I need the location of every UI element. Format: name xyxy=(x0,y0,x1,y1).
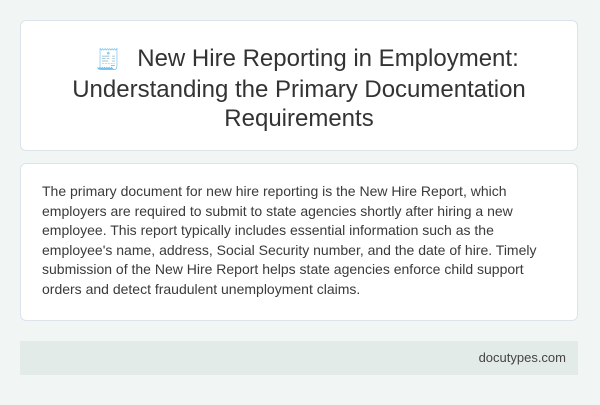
footer xyxy=(20,341,578,375)
title: 🧾 xyxy=(96,49,121,71)
description panel xyxy=(20,163,578,321)
footer: docutypes.com xyxy=(479,350,566,365)
description text: The primary document for new hire reporting is the New Hire Report, which employers are required to submit to state agencies shortly after hiring a new employee. This report typically includes essential information such as the employee's name, address, Social Security number, and the date of hire. Timely submission of the New Hire Report helps state agencies enforce child support orders and detect fraudulent unemployment claims. xyxy=(42,183,536,296)
title: New Hire Reporting in Employment: Understanding the Primary Documentation Requirements xyxy=(72,45,526,132)
title panel xyxy=(20,20,578,151)
